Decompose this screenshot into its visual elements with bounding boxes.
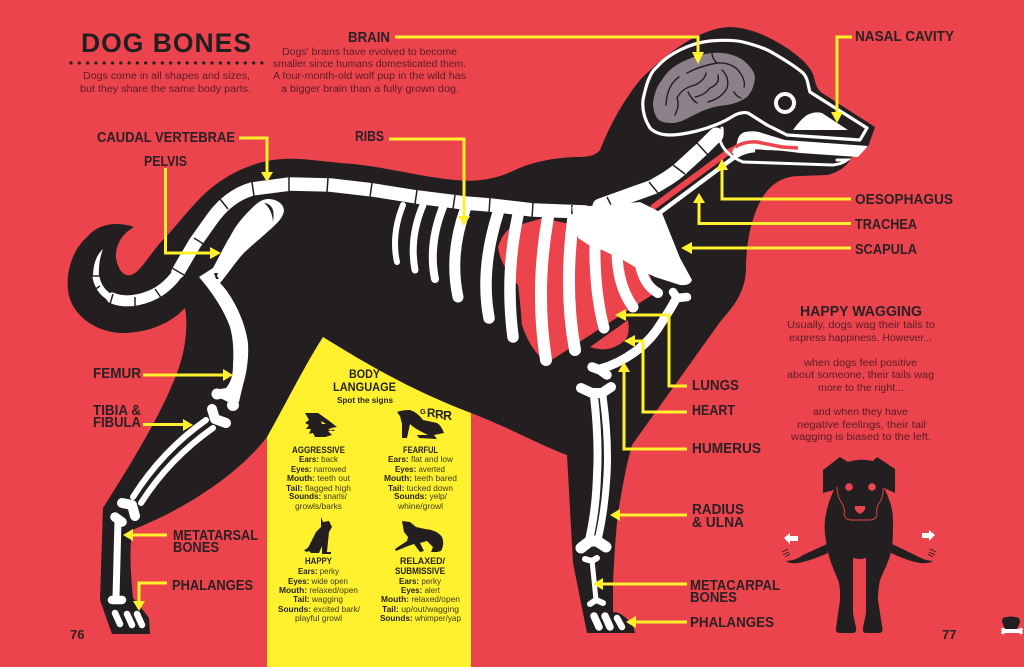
- tibia and fibula: [122, 409, 226, 516]
- skeleton: spine and caudal vertebrae: [92, 177, 585, 307]
- brain text: A four-month-old wolf pup in the wild has: [273, 71, 466, 82]
- label: heart: [624, 335, 735, 419]
- relaxed submissive text: Eyes: alert: [401, 585, 441, 595]
- label: nasal cavity: NASAL CAVITY: [855, 29, 954, 45]
- label: tibia and fibula: FIBULA: [93, 415, 141, 431]
- body language heading: Spot the signs: [337, 395, 393, 405]
- happy wagging text: Usually, dogs wag their tails to: [787, 320, 935, 331]
- icon: fearful dog: [397, 410, 444, 439]
- happy wagging text: wagging is biased to the left.: [790, 432, 931, 443]
- wagging dog: [782, 457, 936, 633]
- icon: relaxed dog: [395, 521, 443, 552]
- humerus: [592, 292, 687, 375]
- lungs: [498, 218, 655, 363]
- nose: [855, 506, 865, 514]
- fearful text: Sounds: yelp/: [394, 491, 448, 501]
- label: metatarsal bones: METATARSAL: [173, 528, 258, 544]
- metacarpal bones: [585, 558, 603, 604]
- icon: happy dog: [304, 517, 332, 554]
- icon: aggressive wolf head: [305, 413, 337, 437]
- scapula: [572, 202, 692, 285]
- intro text: but they share the same body parts.: [80, 84, 251, 95]
- pelvis crescent: [264, 203, 274, 222]
- GRRR text: [420, 407, 452, 423]
- heart: [590, 320, 629, 349]
- label: humerus: [618, 362, 761, 457]
- icon: dog and bone logo: [1001, 616, 1023, 634]
- dog silhouette: [68, 27, 875, 634]
- fearful text: Mouth: teeth bared: [384, 473, 457, 483]
- radius and ulna: [581, 387, 611, 548]
- GRRR text: R: [427, 408, 436, 420]
- label: nasal cavity: [831, 29, 954, 123]
- GRRR text: G: [420, 407, 426, 416]
- label: front phalanges: PHALANGES: [690, 615, 774, 631]
- aggressive text: growls/barks: [295, 501, 342, 511]
- upper teeth and mouth: [732, 131, 868, 158]
- label: heart: HEART: [692, 403, 735, 419]
- happy text: Tail: wagging: [293, 594, 343, 604]
- brain text: a bigger brain than a fully grown dog.: [281, 84, 459, 95]
- fearful text: Tail: tucked down: [388, 483, 453, 493]
- fearful text: whine/growl: [397, 501, 443, 511]
- label: trachea: TRACHEA: [855, 217, 917, 233]
- aggressive text: Tail: flagged high: [286, 483, 351, 493]
- relaxed submissive text: RELAXED/: [400, 556, 445, 567]
- eye: [776, 94, 794, 112]
- label: trachea: [693, 193, 917, 233]
- muzzle outline: [837, 487, 883, 520]
- relaxed submissive text: Sounds: whimper/yap: [380, 613, 461, 623]
- relaxed submissive text: Mouth: relaxed/open: [381, 594, 460, 604]
- label: metacarpal bones: BONES: [690, 590, 737, 606]
- label: radius and ulna: RADIUS: [692, 502, 744, 518]
- label: metacarpal bones: METACARPAL: [690, 578, 780, 594]
- fearful text: Ears: flat and low: [388, 454, 454, 464]
- arrow right: [922, 530, 935, 541]
- label: lungs: [615, 309, 739, 394]
- GRRR text: R: [443, 409, 452, 423]
- aggressive text: Ears: back: [299, 454, 339, 464]
- skeleton: neck vertebrae: [600, 135, 716, 211]
- label: caudal vertebrae: CAUDAL VERTEBRAE: [97, 130, 235, 146]
- label: scapula: [681, 242, 917, 258]
- arrow left: [784, 533, 798, 544]
- happy wagging text: express happiness. However...: [789, 333, 932, 344]
- nasal cavity: [793, 112, 848, 130]
- relaxed submissive text: Tail: up/out/wagging: [382, 604, 459, 614]
- ribs: [395, 205, 658, 360]
- label: radius and ulna: & ULNA: [692, 515, 744, 531]
- front phalanges: [594, 616, 622, 627]
- aggressive text: [286, 445, 351, 511]
- label: ribs: RIBS: [355, 129, 384, 145]
- relaxed submissive text: [380, 556, 461, 623]
- label: oesophagus: OESOPHAGUS: [855, 192, 953, 208]
- body language heading: [333, 367, 396, 405]
- label: hind phalanges: PHALANGES: [172, 578, 253, 594]
- label: oesophagus: [716, 159, 953, 208]
- aggressive text: Sounds: snarls/: [289, 491, 348, 501]
- happy wagging text: about someone, their tails wag: [787, 370, 934, 381]
- aggressive text: AGGRESSIVE: [292, 445, 345, 456]
- wag marks: [782, 549, 936, 557]
- label: caudal vertebrae: [97, 130, 273, 182]
- page number 76: 76: [70, 627, 84, 642]
- label: brain: [348, 30, 704, 64]
- fearful text: [384, 445, 457, 511]
- body language heading: LANGUAGE: [333, 380, 396, 394]
- happy wagging text: [787, 320, 935, 443]
- label: brain: BRAIN: [348, 30, 390, 46]
- label: radius and ulna: [610, 502, 744, 531]
- GRRR text: R: [435, 408, 444, 422]
- happy text: Sounds: excited bark/: [278, 604, 361, 614]
- label: pelvis: PELVIS: [144, 154, 187, 170]
- dotted divider: [71, 61, 262, 65]
- label: hind phalanges: [133, 578, 253, 611]
- page number 77: 77: [942, 627, 956, 642]
- label: metacarpal bones: [593, 578, 780, 606]
- trachea and oesophagus: [652, 146, 755, 214]
- label: metatarsal bones: BONES: [173, 540, 219, 556]
- label: tibia and fibula: [93, 403, 193, 431]
- happy wagging text: negative feelings, their tail: [797, 420, 926, 431]
- intro text: [80, 71, 251, 95]
- happy text: HAPPY: [305, 556, 333, 567]
- brain text: smaller since humans domesticated them.: [273, 59, 466, 70]
- label: femur: FEMUR: [93, 366, 141, 382]
- label: pelvis: [144, 154, 221, 259]
- hind phalanges: [115, 613, 142, 625]
- right tail: [891, 544, 933, 563]
- relaxed submissive text: Ears: perky: [399, 576, 442, 586]
- relaxed submissive text: SUBMISSIVE: [395, 566, 445, 577]
- label: front phalanges: [626, 615, 774, 631]
- panel: body language background: [267, 330, 471, 667]
- happy text: Eyes: wide open: [288, 576, 348, 586]
- aggressive text: Eyes: narrowed: [291, 464, 346, 474]
- left tail: [786, 544, 828, 563]
- title: DOG BONES: [81, 28, 251, 58]
- happy wagging text: more to the right...: [818, 383, 904, 394]
- label: ribs: [355, 129, 470, 226]
- happy text: Mouth: relaxed/open: [279, 585, 358, 595]
- happy text: playful growl: [295, 613, 342, 623]
- label: humerus: HUMERUS: [692, 441, 761, 457]
- brain text: Dogs' brains have evolved to become: [282, 47, 457, 58]
- eyes: [845, 483, 853, 491]
- fearful text: FEARFUL: [403, 445, 438, 456]
- metatarsal bones: [112, 517, 122, 600]
- brain text: [273, 47, 466, 95]
- happy text: [278, 556, 361, 623]
- happy text: Ears: perky: [298, 566, 340, 576]
- brain folds: [666, 54, 744, 115]
- skull: [643, 40, 868, 165]
- tongue: [735, 142, 798, 148]
- happy wagging text: when dogs feel positive: [803, 358, 917, 369]
- lower jaw: [720, 128, 847, 165]
- happy wagging heading: HAPPY WAGGING: [800, 304, 922, 320]
- label: lungs: LUNGS: [692, 378, 739, 394]
- intro text: Dogs come in all shapes and sizes,: [83, 71, 250, 82]
- label: tibia and fibula: TIBIA &: [93, 403, 141, 419]
- aggressive text: Mouth: teeth out: [287, 473, 351, 483]
- femur and pelvis: [199, 199, 284, 411]
- happy wagging text: and when they have: [813, 407, 908, 418]
- body language heading: BODY: [349, 367, 380, 381]
- label: metatarsal bones: [123, 528, 258, 556]
- brain: [653, 53, 755, 123]
- label: femur: [93, 366, 233, 382]
- label: scapula: SCAPULA: [855, 242, 917, 258]
- fearful text: Eyes: averted: [395, 464, 445, 474]
